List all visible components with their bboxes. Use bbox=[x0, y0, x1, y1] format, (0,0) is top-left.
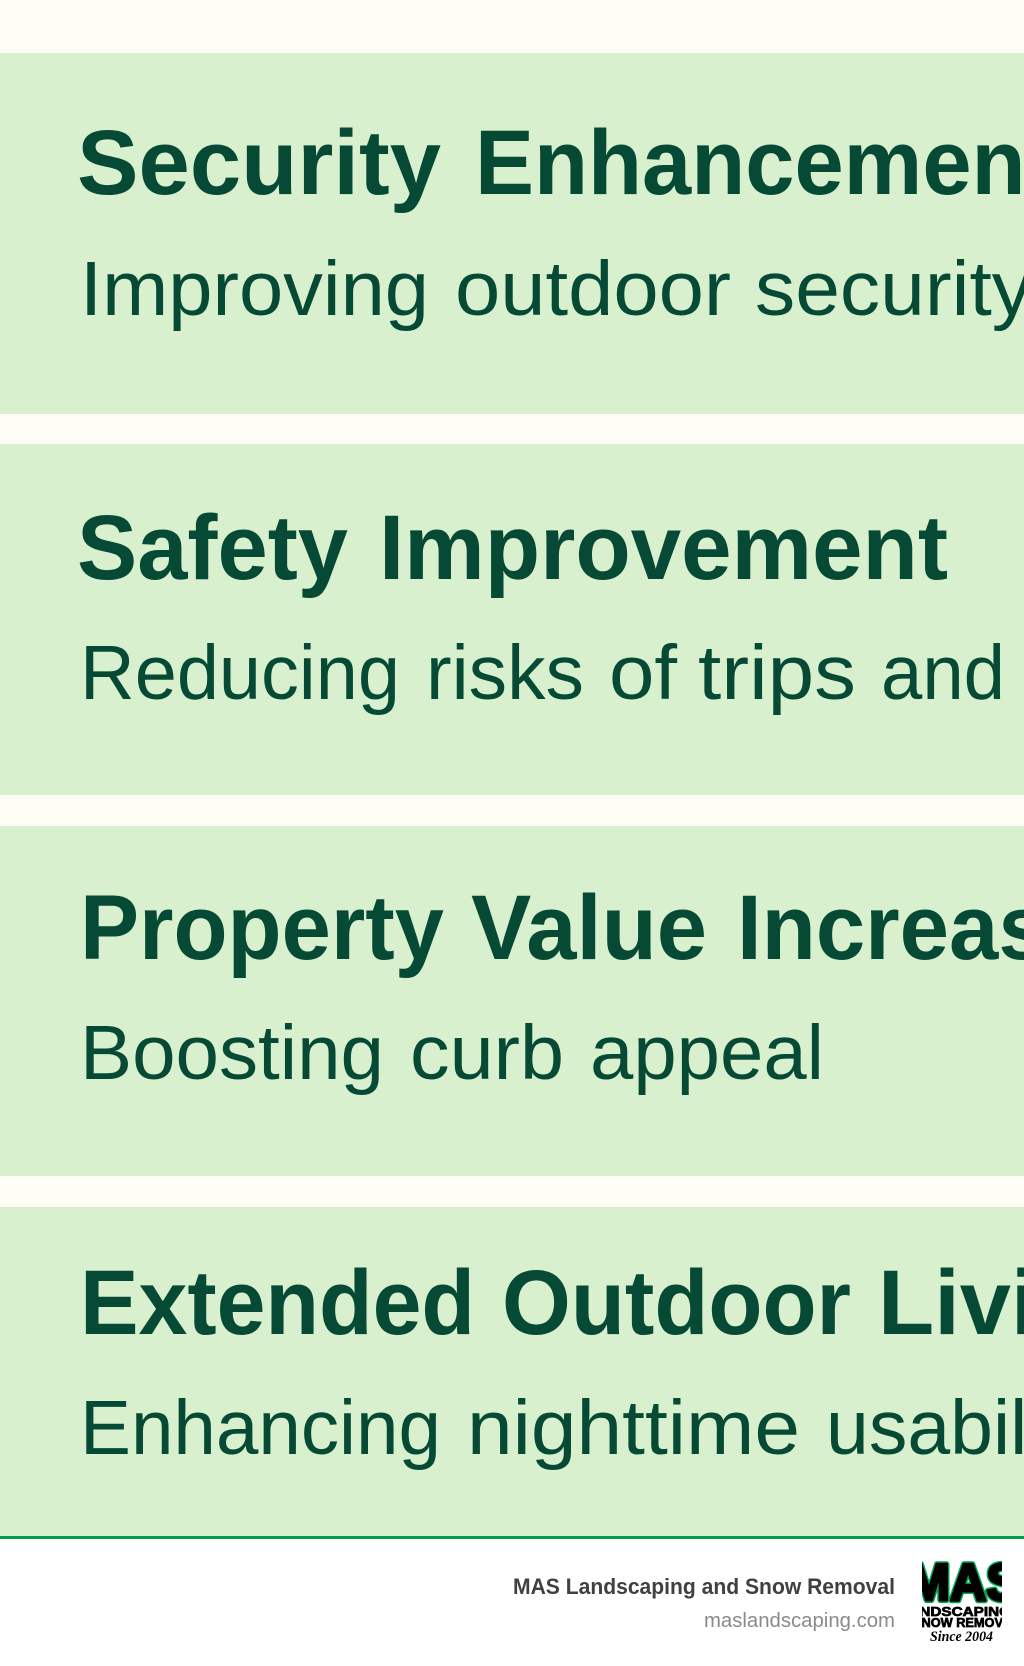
text: enhancing nighttime usability: Enhancing bbox=[80, 1385, 441, 1471]
icon: company logo: SNOW REMOVAL bbox=[913, 1615, 1019, 1630]
text: improving outdoor security: security bbox=[755, 246, 1024, 332]
text: enhancing nighttime usability bbox=[80, 1385, 1024, 1471]
text: boosting curb appeal: Boosting bbox=[80, 1010, 384, 1096]
footer website: maslandscaping.com bbox=[704, 1610, 895, 1632]
footer company name: MAS Landscaping and Snow Removal bbox=[513, 1574, 895, 1599]
text: reducing risks of trips and falls: risks bbox=[426, 630, 584, 716]
text: reducing risks of trips and falls: trips bbox=[698, 630, 856, 716]
heading: safety improvement: Improvement bbox=[379, 497, 948, 599]
text: reducing risks of trips and falls: and bbox=[881, 630, 1005, 716]
heading: security enhancement: Security bbox=[77, 112, 441, 214]
text: enhancing nighttime usability: nighttime bbox=[467, 1385, 800, 1471]
text: boosting curb appeal: curb bbox=[410, 1010, 564, 1096]
heading: security enhancement bbox=[77, 112, 1024, 214]
heading: property value increase: Property bbox=[80, 877, 444, 979]
panel: extended outdoor living bbox=[0, 1207, 1024, 1536]
text: improving outdoor security: Improving bbox=[80, 246, 429, 332]
icon: company logo: LANDSCAPING bbox=[899, 1604, 1011, 1619]
text: boosting curb appeal: appeal bbox=[590, 1010, 824, 1096]
text: boosting curb appeal bbox=[80, 1010, 824, 1096]
panel: property value increase bbox=[0, 826, 1024, 1176]
text: improving outdoor security: outdoor bbox=[455, 246, 731, 332]
footer bbox=[0, 1536, 1024, 1666]
text: reducing risks of trips and falls bbox=[80, 630, 1005, 716]
text: reducing risks of trips and falls: Reducing bbox=[80, 630, 400, 716]
text: reducing risks of trips and falls: of bbox=[609, 630, 678, 716]
panel: safety improvement bbox=[0, 444, 1024, 795]
icon: company logo: MAS bbox=[908, 1554, 1020, 1612]
text: improving outdoor security bbox=[80, 246, 1024, 332]
heading: extended outdoor living bbox=[80, 1252, 1024, 1354]
heading: property value increase bbox=[80, 877, 1024, 979]
heading: extended outdoor living: Extended bbox=[80, 1252, 475, 1354]
icon: company logo bbox=[922, 1560, 1002, 1641]
panel: security enhancement bbox=[0, 53, 1024, 414]
icon: company logo: Since 2004 bbox=[930, 1629, 993, 1645]
heading: property value increase: Value bbox=[471, 877, 707, 979]
heading: safety improvement: Safety bbox=[77, 497, 348, 599]
heading: extended outdoor living: Outdoor bbox=[502, 1252, 851, 1354]
icon: company logo: MAS bbox=[908, 1554, 1020, 1612]
heading: safety improvement bbox=[77, 497, 948, 599]
